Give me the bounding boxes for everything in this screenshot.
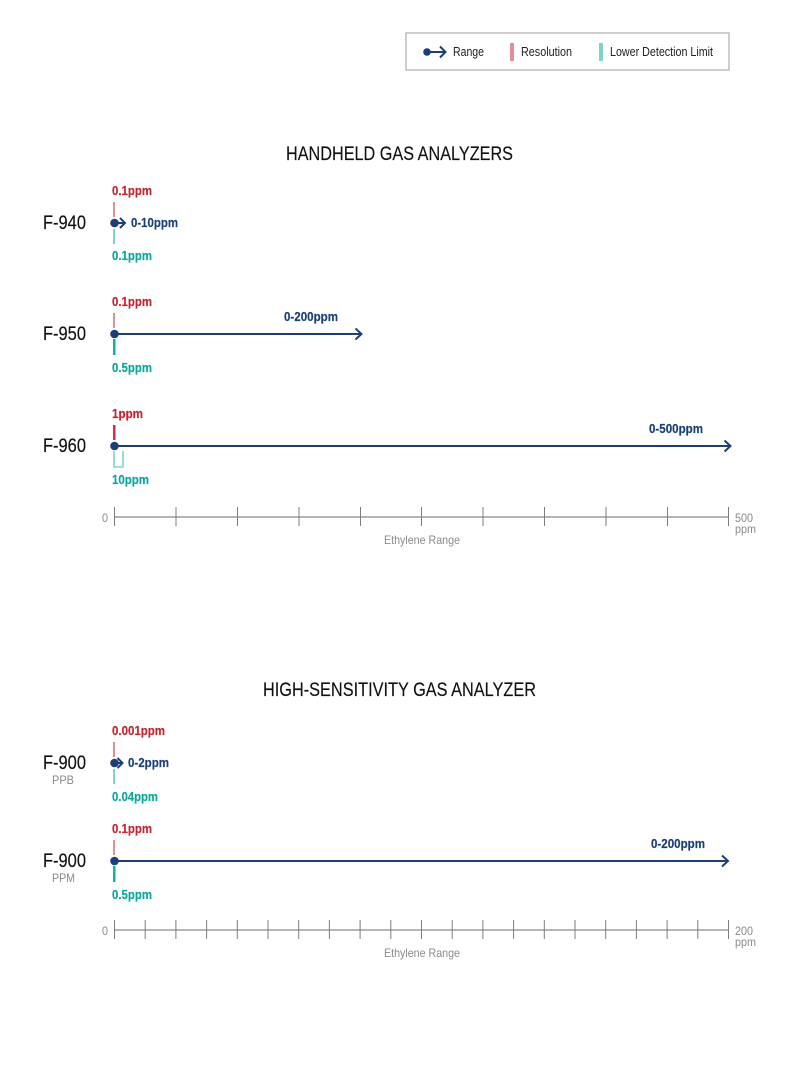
- row: F-940: 0.1ppm: [112, 183, 152, 198]
- row: F-900 PPM: 0.5ppm: [112, 887, 152, 902]
- row: F-950: 0.1ppm: [112, 294, 152, 309]
- row: F-960: [43, 406, 730, 487]
- axis: 0 to 200 ppm: 200: [735, 924, 753, 938]
- legend: lower detection limit swatch: [599, 43, 603, 61]
- legend: lower detection limit label: Lower Detection Limit: [610, 45, 713, 59]
- axis: 0 to 500 ppm: [102, 507, 756, 547]
- row: F-900 PPM: 0-200ppm: [651, 836, 705, 851]
- row: F-940: 0-10ppm: [131, 215, 178, 230]
- row: F-960: 0-500ppm: [649, 421, 703, 436]
- row: F-960: F-960: [43, 436, 86, 457]
- row: F-950: [43, 294, 362, 375]
- axis: 0 to 500 ppm: ppm: [735, 522, 756, 536]
- row: F-900 PPM: 0.1ppm: [112, 821, 152, 836]
- row: F-900 PPB: PPB: [52, 773, 74, 787]
- row: F-900 PPM: [43, 821, 728, 902]
- axis: 0 to 200 ppm: [102, 920, 756, 960]
- axis: 0 to 500 ppm: 0: [102, 511, 108, 525]
- row: F-960: 1ppm: [112, 406, 143, 421]
- axis: 0 to 200 ppm: Ethylene Range: [384, 946, 460, 960]
- row: F-940: F-940: [43, 213, 86, 234]
- row: F-900 PPB: F-900: [43, 753, 86, 774]
- legend: resolution swatch: [510, 43, 514, 61]
- legend: range label: Range: [453, 45, 484, 59]
- axis: 0 to 200 ppm: 0: [102, 924, 108, 938]
- row: F-900 PPB: 0.001ppm: [112, 723, 165, 738]
- row: F-900 PPM: PPM: [52, 871, 75, 885]
- row: F-950: 0.5ppm: [112, 360, 152, 375]
- row: F-940: [43, 183, 178, 263]
- axis: 0 to 200 ppm: ppm: [735, 935, 756, 949]
- row: F-950: 0-200ppm: [284, 309, 338, 324]
- legend: resolution label: Resolution: [521, 45, 572, 59]
- row: F-900 PPB: 0-2ppm: [128, 755, 169, 770]
- row: F-950: F-950: [43, 324, 86, 345]
- row: F-900 PPM: F-900: [43, 851, 86, 872]
- axis: 0 to 500 ppm: Ethylene Range: [384, 533, 460, 547]
- row: F-960: 10ppm: [112, 472, 149, 487]
- heading: handheld gas analyzers: HANDHELD GAS ANALYZERS: [286, 144, 513, 165]
- legend: range icon: [423, 46, 446, 58]
- row: F-900 PPB: [43, 723, 169, 804]
- axis: 0 to 500 ppm: 500: [735, 511, 753, 525]
- heading: high-sensitivity gas analyzer: HIGH-SENSITIVITY GAS ANALYZER: [263, 680, 536, 701]
- row: F-940: 0.1ppm: [112, 248, 152, 263]
- row: F-900 PPB: 0.04ppm: [112, 789, 158, 804]
- legend: [406, 33, 729, 70]
